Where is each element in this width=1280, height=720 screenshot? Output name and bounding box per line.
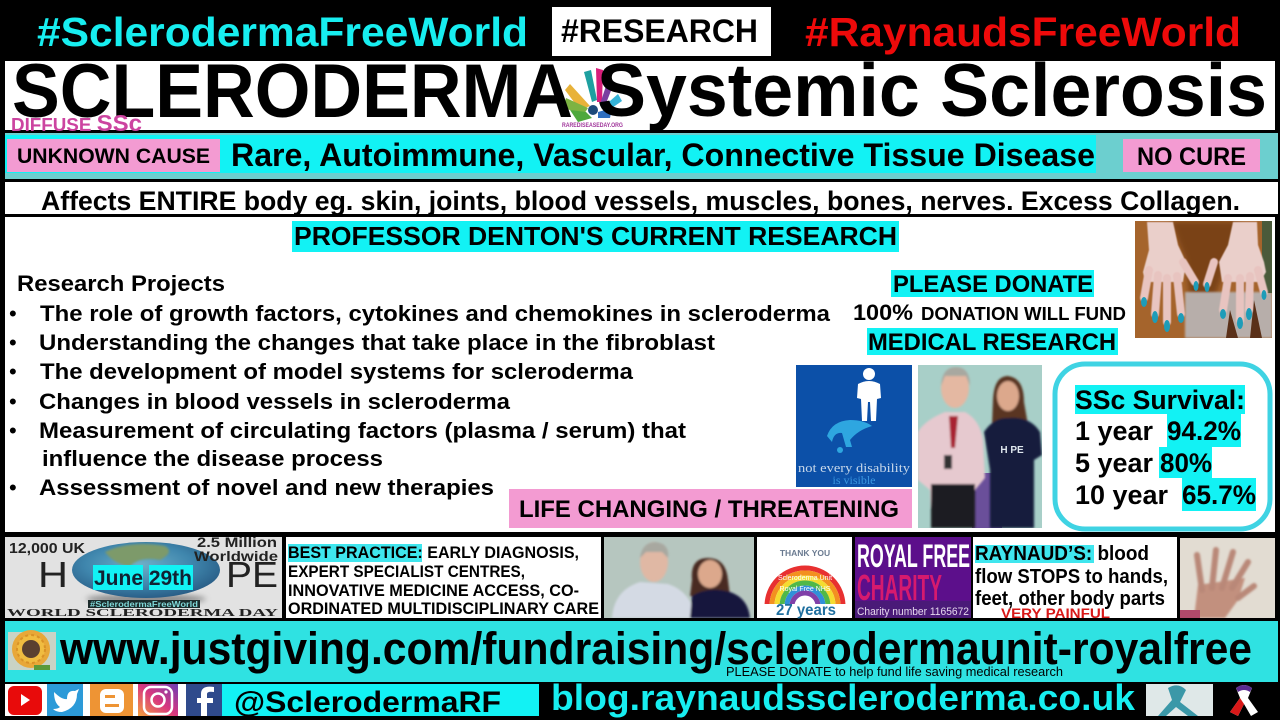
unknown cause tag (7, 139, 220, 172)
raynauds panel: flow STOPS to hands, (975, 566, 1168, 588)
best practice panel: BEST PRACTICE: EARLY DIAGNOSIS, (288, 543, 579, 562)
royal free charity panel: ROYAL FREE (857, 538, 970, 574)
royal free charity panel (855, 537, 971, 618)
best practice panel: EXPERT SPECIALIST CENTRES, (288, 562, 525, 581)
photo: professor and patient: H PE (1000, 445, 1024, 456)
donate callout: DONATION WILL FUND (921, 304, 1126, 324)
world scleroderma day caption: WORLD SCLERODERMA DAY (7, 607, 278, 619)
research projects list: influence the disease process (42, 446, 383, 471)
title: scleroderma: SCLERODERMA (12, 49, 573, 134)
research projects list: • (9, 475, 17, 500)
hope lettering: H (38, 554, 68, 595)
icon: youtube (8, 686, 42, 715)
life changing tag: LIFE CHANGING / THREATENING (519, 496, 899, 523)
survival stats box: 65.7% (1182, 480, 1256, 510)
icon: twitter (47, 684, 83, 716)
unknown cause tag: UNKNOWN CAUSE (17, 145, 210, 168)
date: june 29th: June 29th (94, 567, 192, 590)
diffuse ssc label: DIFFUSE SSc (11, 110, 142, 136)
best practice panel (286, 537, 601, 618)
research projects list: The development of model systems for scleroderma (40, 359, 634, 384)
donation note: PLEASE DONATE to help fund life saving medical research (726, 665, 1063, 679)
research projects list: • (9, 301, 17, 326)
survival stats box: 5 year (1075, 448, 1153, 478)
donate callout (853, 270, 1126, 356)
globe (72, 542, 220, 598)
rainbow (764, 566, 846, 604)
no cure tag: NO CURE (1137, 143, 1246, 171)
donate callout: PLEASE DONATE (893, 271, 1093, 298)
list heading: Research Projects (17, 271, 225, 296)
research projects list: • (9, 359, 17, 384)
hashtag: raynauds free world: #RaynaudsFreeWorld (805, 9, 1241, 55)
survival stats box: 94.2% (1167, 416, 1241, 446)
thank you rainbow panel (757, 537, 852, 618)
icon: blogger (90, 684, 133, 716)
survival stats box: SSc Survival: (1075, 385, 1245, 415)
icon: not every disability is visible (796, 365, 912, 487)
stat: uk patients: 12,000 UK (9, 540, 85, 557)
disease description: Rare, Autoimmune, Vascular, Connective Tissue Disease (231, 137, 1095, 173)
top hashtag bar (0, 0, 1280, 61)
icon: facebook (186, 684, 222, 716)
icon: teal ribbon badge (1146, 684, 1213, 716)
raynauds panel: VERY PAINFUL (1001, 605, 1110, 621)
research projects list: The role of growth factors, cytokines and chemokines in scleroderma (40, 301, 831, 326)
stat: worldwide patients: 2.5 Million (197, 534, 277, 550)
disease descriptor band (5, 133, 1278, 179)
icon: awareness ribbon (1230, 685, 1258, 716)
research projects list (9, 271, 831, 500)
years count: 27 years (776, 602, 836, 619)
research projects list: • (9, 389, 17, 414)
raynauds panel: feet, other body parts (975, 588, 1165, 610)
logo caption: RAREDISEASEDAY.ORG (562, 123, 623, 129)
survival stats box: 10 year (1075, 480, 1168, 510)
photo: professor and patient (918, 365, 1042, 528)
photo: professor and patient, charity shirt (604, 537, 754, 618)
heading: current research: PROFESSOR DENTON'S CURRENT RESEARCH (294, 221, 897, 251)
twitter handle: @SclerodermaRF (234, 686, 501, 719)
world scleroderma day hope panel (5, 534, 282, 619)
hashtag strip: #SclerodermaFreeWorld (90, 600, 198, 609)
life changing tag (509, 489, 912, 528)
title: systemic sclerosis: Systemic Sclerosis (597, 48, 1267, 132)
icon: rare disease day hands logo (562, 68, 623, 129)
world scleroderma day hope panel: PE (226, 554, 278, 595)
main panel (5, 217, 1275, 532)
survival stats box (1055, 364, 1270, 529)
research projects list: Understanding the changes that take place in the fibroblast (39, 330, 716, 355)
photo: hands with blue nails (1135, 221, 1272, 338)
thank you rainbow panel: THANK YOU (780, 548, 830, 558)
best practice panel: ORDINATED MULTIDISCIPLINARY CARE (288, 599, 599, 618)
affected body parts line: Affects ENTIRE body eg. skin, joints, blood vessels, muscles, bones, nerves. Excess Collagen. (41, 186, 1240, 216)
icon: instagram (138, 684, 178, 716)
title band (5, 48, 1275, 136)
research projects list: Measurement of circulating factors (plasma / serum) that (39, 418, 687, 443)
survival stats box: 80% (1160, 448, 1212, 478)
social media row (5, 677, 1258, 719)
world scleroderma day hope panel: Worldwide (194, 548, 278, 564)
icon caption: not every disability (798, 460, 911, 475)
photo: raynauds hand (1180, 538, 1275, 618)
research tag (552, 7, 771, 56)
raynauds panel (973, 537, 1177, 621)
icon: not every disability is visible: is visible (832, 473, 876, 487)
research projects list: • (9, 330, 17, 355)
research projects list: • (9, 418, 17, 443)
royal free charity panel: Charity number 1165672 (857, 606, 969, 618)
royal free charity panel: CHARITY (857, 567, 942, 608)
donation url band (5, 621, 1278, 682)
icon: sunflower (8, 630, 56, 670)
best practice panel: INNOVATIVE MEDICINE ACCESS, CO- (288, 581, 579, 600)
research projects list: Assessment of novel and new therapies (39, 475, 494, 500)
donate callout: MEDICAL RESEARCH (868, 329, 1116, 356)
donate callout: 100% (853, 300, 913, 325)
research tag: #RESEARCH (561, 13, 758, 49)
hashtag: scleroderma free world: #SclerodermaFreeWorld (37, 9, 528, 55)
thank you rainbow panel: Royal Free NHS (780, 586, 831, 593)
survival stats box: 1 year (1075, 416, 1153, 446)
research projects list: Changes in blood vessels in scleroderma (39, 389, 511, 414)
raynauds panel: RAYNAUD’S: blood (975, 543, 1149, 565)
blog url: blog.raynaudsscleroderma.co.uk (551, 677, 1136, 718)
rainbow label: Scleroderma Unit (778, 575, 832, 582)
